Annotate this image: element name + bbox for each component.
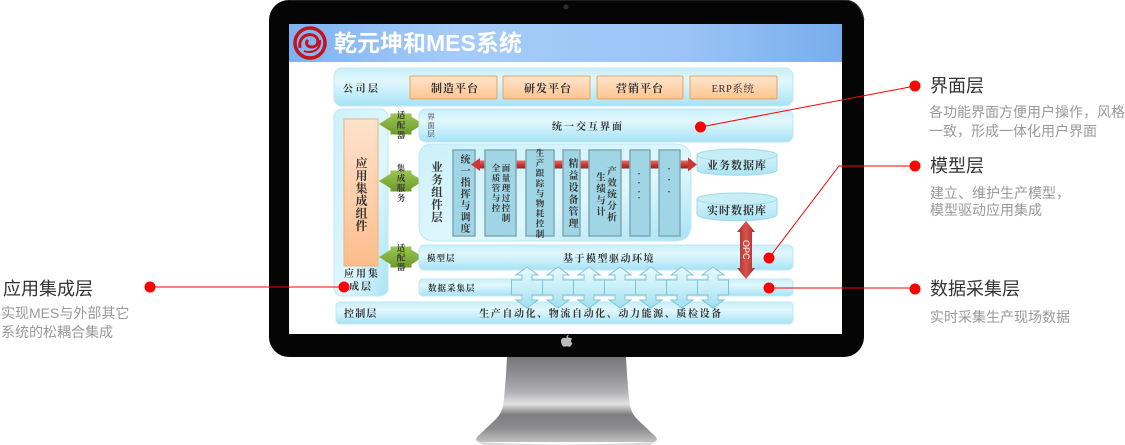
column: more 2: · [667, 187, 671, 197]
column: production tracking [526, 148, 554, 239]
database: business [697, 149, 777, 175]
database: real-time [697, 193, 777, 221]
red arrow left head [471, 158, 480, 171]
adapter: bottom: 适配器 [396, 243, 406, 272]
panel: data acquisition layer: 数据采集层 [428, 283, 476, 293]
red arrow shaft [478, 160, 688, 168]
panel: control layer [336, 302, 793, 324]
database: business: 业务数据库 [707, 158, 767, 172]
column: unified command [453, 150, 475, 236]
panel: company layer [334, 68, 793, 106]
OPC arrow: OPC [741, 240, 751, 260]
callout: interface layer: 界面层 [930, 76, 984, 96]
monitor stand [476, 357, 657, 445]
column: quality management: 全质管与控 [491, 163, 501, 214]
apple logo [561, 335, 572, 347]
column: more 2 [659, 150, 680, 236]
column: production performance: 产效统分析 [605, 166, 617, 224]
panel: interface layer: 统一交互界面 [552, 120, 624, 133]
callout: model layer: 模型驱动应用集成 [930, 202, 1042, 218]
column: more 1: · [637, 187, 641, 197]
column: more 2: · [667, 164, 671, 174]
database: real-time: 实时数据库 [707, 203, 767, 217]
panel: model layer: 模型层 [427, 253, 456, 263]
callout: data acquisition layer: 实时采集生产现场数据 [930, 309, 1070, 325]
logo [295, 28, 325, 58]
adapter: top: 适配器 [396, 110, 406, 140]
callout: model layer: 模型层 [930, 156, 984, 176]
panel: model layer: 基于模型驱动环境 [563, 252, 655, 265]
OPC arrow [737, 221, 755, 279]
adapter: integration service [379, 163, 423, 204]
button: ERP [690, 76, 777, 99]
column: more 1: · [637, 193, 641, 203]
callout: data acquisition layer: 数据采集层 [930, 279, 1020, 299]
column: quality management [485, 150, 516, 236]
panel: business component layer: 业务组件层 [430, 160, 443, 224]
screen [289, 24, 842, 334]
application integration component: 应用集成组件 [354, 156, 368, 232]
callout: interface layer [695, 76, 1125, 139]
panel: interface layer: 界面层 [426, 113, 436, 139]
column: production tracking: 生产跟踪与物耗控制 [535, 148, 545, 239]
button: ERP: ERP系统 [712, 82, 754, 95]
column: more 2: · [667, 175, 671, 185]
callout: application integration layer [1, 279, 350, 340]
panel: business component layer [419, 144, 697, 241]
webcam [564, 4, 568, 10]
red arrow right head [688, 158, 697, 172]
column: quality management: 面量理过控制 [501, 163, 511, 224]
panel: company layer: 公司层 [343, 82, 380, 95]
column: lean equipment: 精益设备管理 [566, 157, 578, 230]
column: more 1: · [637, 169, 641, 179]
button: R&D platform [503, 76, 590, 99]
panel: data acquisition layer [419, 279, 793, 296]
button: manufacturing platform [410, 76, 497, 99]
callout: interface layer: 一致，形成一体化用户界面 [929, 123, 1097, 139]
button: marketing platform [597, 76, 683, 99]
button: manufacturing platform: 制造平台 [431, 81, 479, 95]
column: unified command: 统一指挥与调度 [458, 153, 470, 234]
callout: model layer [764, 156, 1070, 264]
column: more 1 [630, 150, 650, 236]
application integration component [344, 119, 378, 266]
monitor body [269, 0, 864, 357]
panel: application integration layer: 成层 [349, 280, 373, 293]
button: R&D platform: 研发平台 [524, 81, 572, 95]
column: more 1: · [637, 178, 641, 188]
panel: model layer [419, 245, 793, 270]
callout: data acquisition layer [764, 279, 1070, 325]
panel: control layer: 生产自动化、物流自动化、动力能源、质检设备 [479, 307, 723, 320]
title bar [289, 24, 842, 62]
column: production performance: 生绩与计 [594, 171, 606, 218]
adapter: integration service: 集成服务 [396, 163, 406, 204]
panel: application integration layer: 应用集 [344, 267, 380, 280]
callout: interface layer: 各功能界面方便用户操作，风格 [929, 104, 1125, 120]
panel: interface layer [419, 109, 793, 142]
adapter: top [379, 110, 423, 140]
callout: application integration layer: 实现MES与外部其它 [1, 305, 129, 321]
data flow arrows [512, 267, 728, 308]
callout: application integration layer: 应用集成层 [3, 279, 93, 299]
column: lean equipment [563, 150, 580, 236]
callout: model layer: 建立、维护生产模型， [930, 185, 1070, 201]
adapter: bottom [379, 243, 423, 272]
title text: 乾元坤和MES系统 [334, 30, 522, 56]
panel: control layer: 控制层 [344, 307, 378, 320]
callout: application integration layer: 系统的松耦合集成 [1, 324, 113, 340]
panel: application integration layer [334, 109, 388, 296]
button: marketing platform: 营销平台 [616, 81, 664, 95]
column: production performance [589, 150, 621, 236]
